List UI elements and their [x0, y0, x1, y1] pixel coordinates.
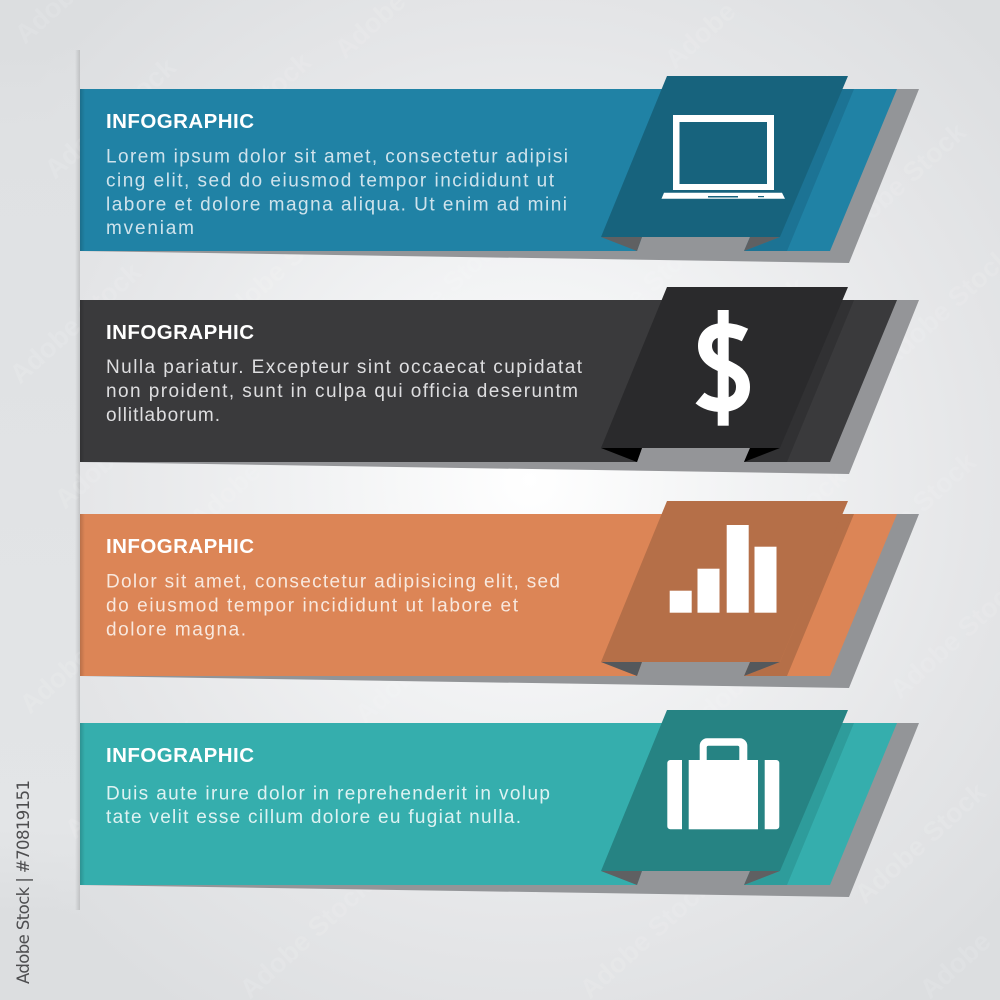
left edge shading [80, 514, 85, 676]
watermarks: Adobe Stock [184, 401, 327, 534]
body text [106, 146, 568, 239]
body text [106, 357, 583, 426]
watermarks: Adobe Stock [569, 226, 712, 359]
body text: ollitlaborum. [106, 405, 220, 426]
body text: cing elit, sed do eiusmod tempor incididunt ut [106, 170, 555, 192]
body text: Dolor sit amet, consectetur adipisicing elit, sed [106, 572, 560, 592]
left edge shading [80, 723, 85, 885]
watermarks: Adobe Stock [679, 606, 822, 739]
body text: Duis aute irure dolor in reprehenderit in volup [106, 784, 550, 804]
watermarks: Adobe Stock [59, 711, 202, 844]
body text [106, 572, 560, 640]
left edge shading [80, 89, 85, 251]
watermarks: Adobe Stock [14, 586, 157, 719]
icon: dollar sign [700, 310, 745, 426]
banner band [80, 723, 897, 885]
body text: tate velit esse cillum dolore eu fugiat nulla. [106, 807, 521, 828]
heading: INFOGRAPHIC [106, 321, 254, 344]
watermarks: Adobe Stock [849, 776, 992, 909]
ribbon fold [601, 76, 854, 251]
body text: do eiusmod tempor incididunt ut labore et [106, 596, 519, 616]
watermarks: Adobe Stock [829, 116, 972, 249]
panel: blue laptop banner [80, 76, 919, 263]
stock id label: Adobe Stock | #70819151 [14, 780, 33, 984]
watermarks: Adobe Stock [839, 446, 982, 579]
body text: Lorem ipsum dolor sit amet, consectetur adipisi [106, 146, 568, 168]
heading: INFOGRAPHIC [106, 535, 254, 558]
banner band [80, 89, 897, 251]
watermarks: Adobe Stock [209, 201, 352, 334]
watermarks: Adobe Stock [554, 561, 697, 694]
heading: INFOGRAPHIC [106, 744, 254, 767]
icon: laptop [662, 115, 785, 199]
icon: briefcase [667, 738, 779, 829]
watermarks: Adobe Stock [389, 726, 532, 859]
watermarks: Adobe Stock [49, 381, 192, 514]
watermarks: Adobe Stock [719, 736, 862, 869]
watermarks: Adobe Stock [219, 551, 362, 684]
banner band [80, 300, 897, 462]
watermarks: Adobe Stock [499, 106, 642, 239]
body text: Nulla pariatur. Excepteur sint occaecat cupidatat [106, 357, 583, 378]
watermarks: Adobe Stock [39, 51, 182, 184]
left side strip [0, 45, 80, 915]
banner shadow [80, 723, 919, 897]
watermarks: Adobe Stock [519, 766, 662, 899]
ribbon fold [601, 710, 854, 885]
banner shadow [80, 514, 919, 688]
panel: dark dollar banner [80, 287, 919, 474]
watermarks: Adobe Stock [699, 66, 842, 199]
panel: teal briefcase banner [80, 710, 919, 897]
banner shadow [80, 300, 919, 474]
body text: labore et dolore magna aliqua. Ut enim ad mini [106, 194, 567, 216]
banner band [80, 514, 897, 676]
ribbon fold [601, 287, 854, 462]
watermarks: Adobe Stock [184, 756, 327, 889]
banner shadow [80, 89, 919, 263]
panel: orange chart banner [80, 501, 919, 688]
left edge shading [80, 300, 85, 462]
heading: INFOGRAPHIC [106, 110, 254, 133]
watermarks: Adobe Stock [379, 396, 522, 529]
watermarks: Adobe Stock [669, 271, 812, 404]
icon: bar chart [670, 525, 776, 613]
watermarks: Adobe Stock [4, 256, 147, 389]
watermarks: Adobe Stock [369, 86, 512, 219]
body text [106, 784, 550, 828]
watermarks: Adobe Stock [504, 436, 647, 569]
watermarks: Adobe Stock [369, 226, 512, 359]
watermarks: Adobe Stock [174, 46, 317, 179]
body text: non proident, sunt in culpa qui officia deseruntm [106, 381, 578, 402]
body text: dolore magna. [106, 620, 246, 640]
watermarks: Adobe Stock [709, 461, 852, 594]
watermarks: Adobe Stock [349, 596, 492, 729]
body text: mveniam [106, 218, 194, 239]
ribbon fold [601, 501, 854, 676]
